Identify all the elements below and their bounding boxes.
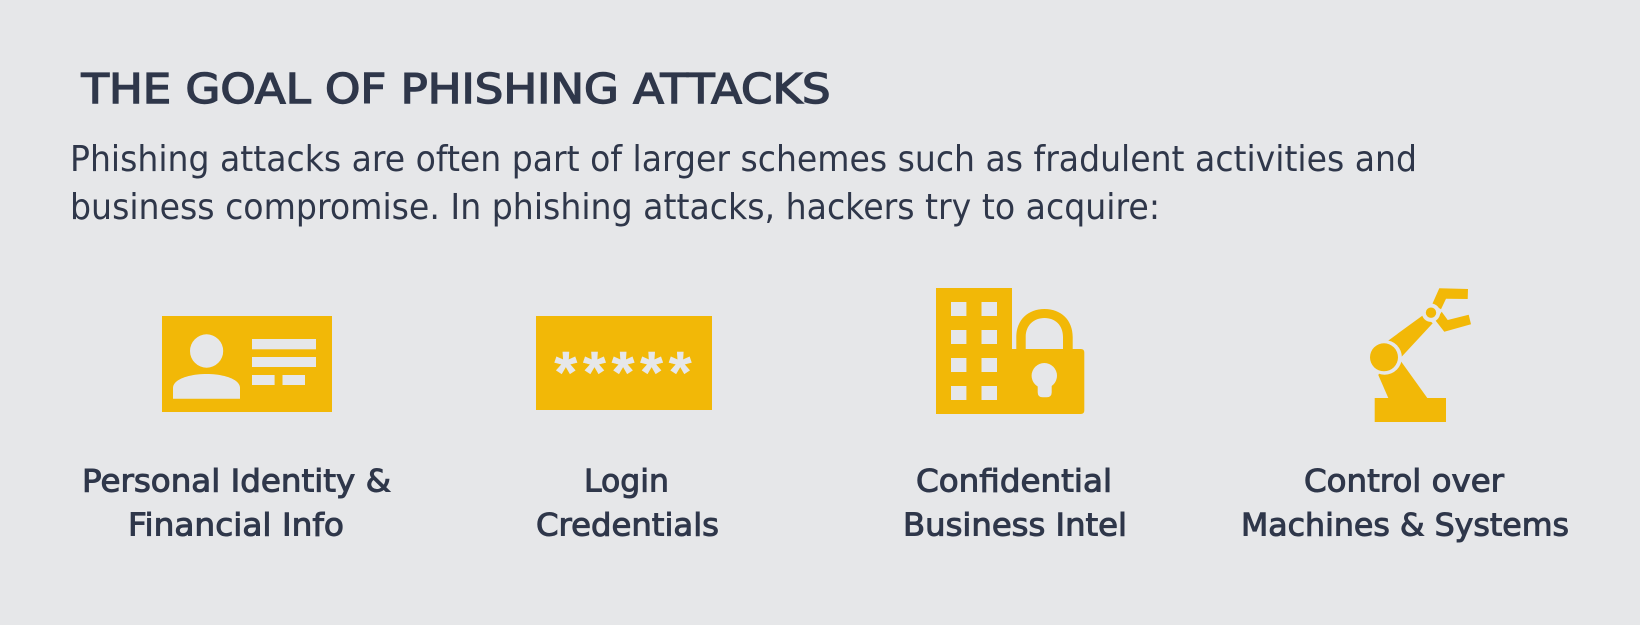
icon: identity card <box>162 316 332 412</box>
title: THE GOAL OF PHISHING ATTACKS <box>80 65 831 113</box>
label: personal identity <box>82 464 391 544</box>
icon: robotic arm <box>1367 288 1471 422</box>
label: control over machines: Control over <box>1304 464 1504 500</box>
label: control over machines <box>1241 464 1569 544</box>
intro text <box>70 139 1417 228</box>
label: confidential business intel: Business Intel <box>903 508 1127 544</box>
label: personal identity: Financial Info <box>128 508 344 544</box>
icon: password field <box>536 316 712 410</box>
label: login credentials: Login <box>584 464 669 500</box>
icon: building with padlock <box>936 288 1084 414</box>
label: login credentials: Credentials <box>536 508 719 544</box>
label: control over machines: Machines & Systems <box>1241 508 1569 544</box>
label: confidential business intel <box>903 464 1127 544</box>
label: login credentials <box>536 464 719 544</box>
label: confidential business intel: Confidential <box>916 464 1112 500</box>
intro text: Phishing attacks are often part of larger schemes such as fradulent activities and <box>70 139 1417 180</box>
label: personal identity: Personal Identity & <box>82 464 391 500</box>
intro text: business compromise. In phishing attacks, hackers try to acquire: <box>70 187 1160 228</box>
icon: password field: ***** <box>554 340 692 406</box>
